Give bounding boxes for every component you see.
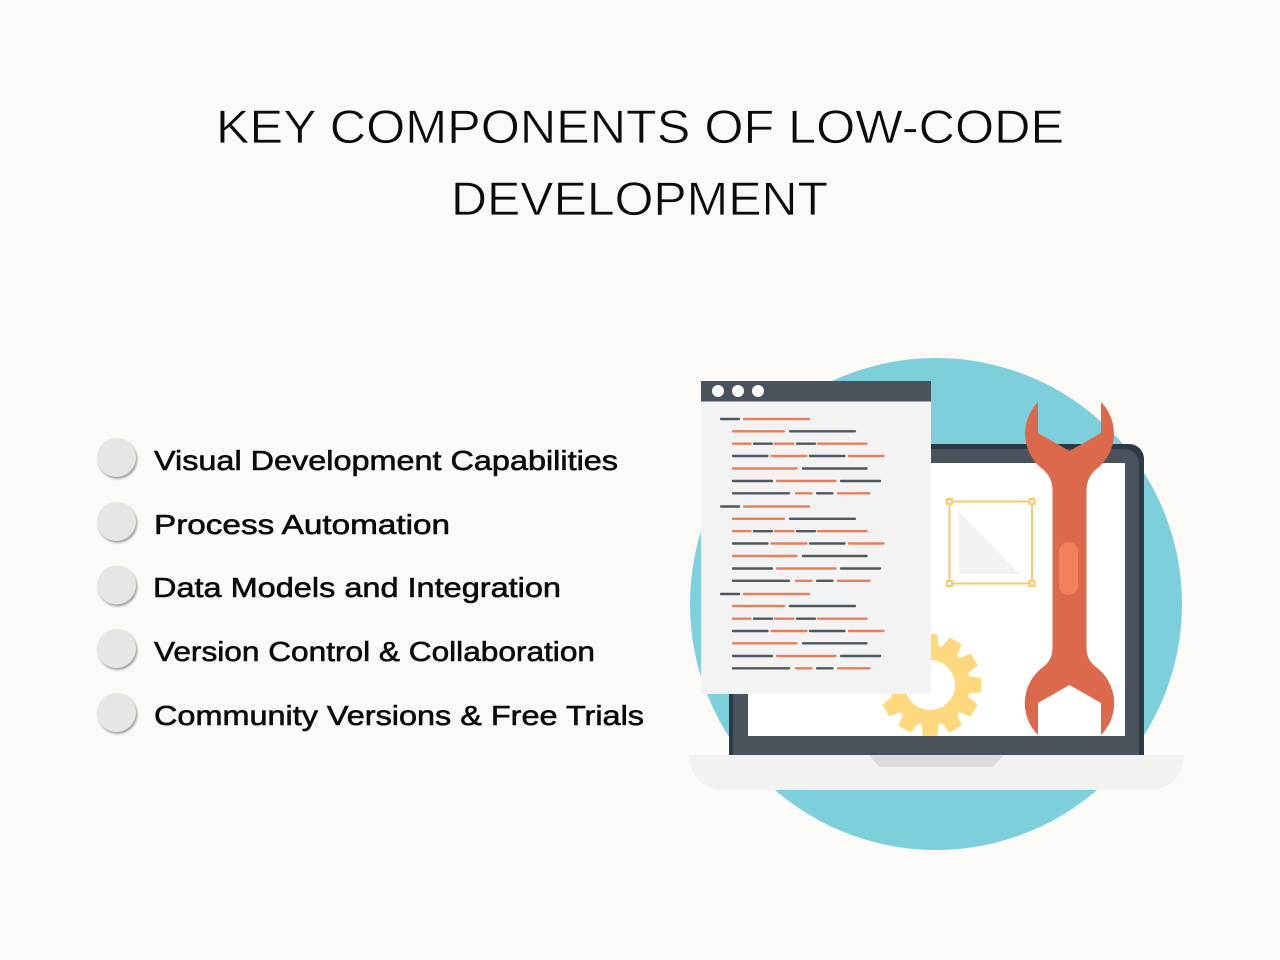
icon: wrench (1025, 402, 1114, 735)
code lines (721, 419, 884, 668)
item: version control (97, 629, 595, 668)
item: visual development: Visual Development Capabilities (154, 445, 618, 476)
title: DEVELOPMENT (451, 172, 828, 225)
illustration: laptop with code and wrench (689, 358, 1184, 850)
title (216, 100, 1064, 225)
item: community versions (97, 693, 644, 732)
laptop base (689, 755, 1184, 790)
item: visual development (97, 438, 618, 477)
item: community versions: Community Versions & Free Trials (154, 700, 644, 731)
list of key components (97, 438, 644, 732)
code window (701, 381, 931, 694)
item: data models (97, 566, 561, 604)
item: version control: Version Control & Collaboration (154, 636, 595, 667)
item: data models: Data Models and Integration (153, 572, 561, 603)
window title bar (701, 381, 931, 402)
laptop screen frame (729, 444, 1144, 755)
teal circle (690, 358, 1182, 850)
icon: image placeholder (947, 499, 1034, 586)
item: process automation (97, 502, 450, 541)
icon: gear (879, 634, 981, 736)
title: KEY COMPONENTS OF LOW-CODE (216, 100, 1064, 153)
item: process automation: Process Automation (154, 509, 450, 540)
